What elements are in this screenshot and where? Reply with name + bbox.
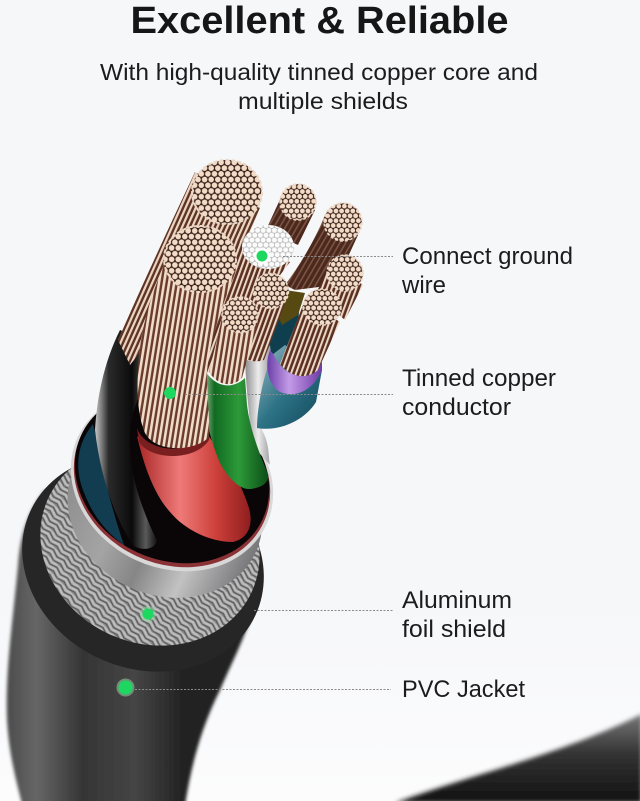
- label: tinned copper: Tinned copper: [402, 365, 556, 392]
- small front conductor: [209, 297, 258, 384]
- label: foil shield: Aluminum: [402, 587, 512, 614]
- label: ground wire: wire: [401, 272, 446, 299]
- cable illustration: [0, 160, 363, 801]
- right conductor: [315, 255, 363, 320]
- subtitle: [100, 59, 538, 114]
- blue wire: [78, 424, 124, 545]
- olive filler: [275, 290, 305, 325]
- label: foil shield: foil shield: [402, 616, 506, 643]
- white wire: [245, 345, 271, 465]
- dark teal filler: [262, 296, 300, 370]
- green wire: [203, 368, 268, 489]
- marker: PVC jacket: [116, 678, 134, 696]
- label: ground wire: [401, 243, 573, 299]
- cable opening: [46, 360, 298, 594]
- leader lines: [135, 256, 393, 690]
- label: ground wire: Connect ground: [402, 243, 573, 270]
- teal wire: [257, 345, 322, 429]
- marker: foil shield: [140, 606, 156, 622]
- subtitle: With high-quality tinned copper core and: [100, 59, 538, 85]
- silver ring band: [38, 391, 292, 629]
- upper right conductor: [285, 203, 362, 290]
- title: Excellent & Reliable: [130, 0, 508, 42]
- marker: tinned copper: [164, 387, 176, 399]
- back large conductor: [118, 160, 262, 365]
- label: tinned copper: conductor: [402, 394, 511, 421]
- ring rim: [41, 358, 303, 604]
- label: foil shield: [402, 587, 512, 643]
- black wire: [95, 330, 157, 549]
- label: tinned copper: [402, 365, 556, 421]
- subtitle: multiple shields: [238, 88, 408, 114]
- top small conductor: [266, 184, 316, 245]
- corner cable shadow: [395, 714, 640, 801]
- label: PVC jacket: PVC Jacket: [402, 676, 525, 703]
- braided shield: [7, 409, 293, 681]
- jacket collar: [0, 415, 300, 711]
- centre small conductor: [246, 274, 288, 361]
- central brown strands: [205, 240, 290, 375]
- PVC jacket: [7, 490, 252, 801]
- large front conductor: [138, 226, 237, 448]
- red wire: [137, 434, 251, 542]
- red wire collar: [137, 428, 209, 456]
- lower right conductor: [280, 289, 341, 376]
- red sliver inside ring: [45, 361, 299, 599]
- white ground conductor: [242, 225, 294, 269]
- marker: ground wire: [254, 248, 270, 264]
- purple ring: [267, 350, 322, 394]
